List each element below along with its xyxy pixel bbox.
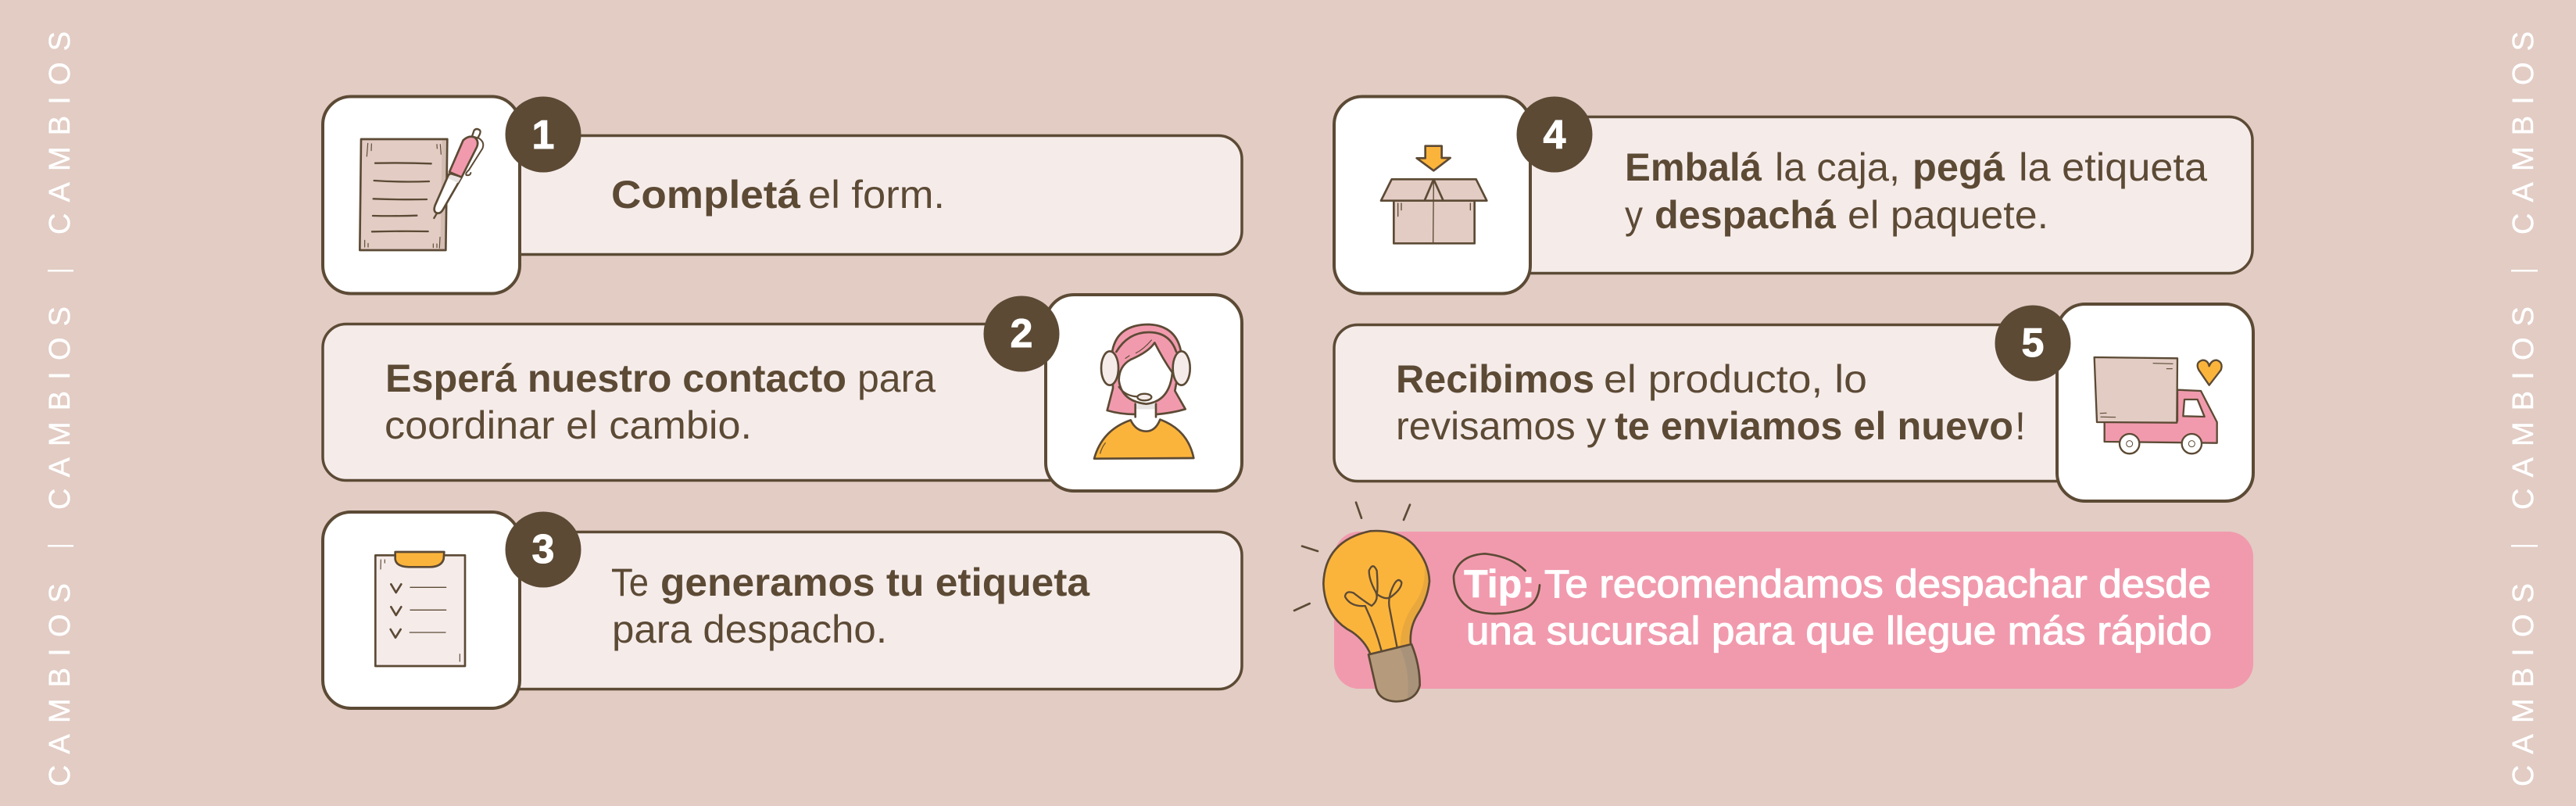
tip text [1464, 562, 2212, 653]
step 1 text: el form. [808, 173, 945, 217]
number badge 3 [505, 511, 581, 588]
icon tile 5 [2057, 304, 2253, 501]
step 2 text: para [857, 356, 936, 400]
right vertical label: CAMBIOS [2507, 31, 2540, 235]
step 5 text: ! [2015, 404, 2026, 448]
number badge 4: 4 [1544, 113, 1566, 158]
number badge 2: 2 [1011, 311, 1032, 356]
text bar 2 [323, 324, 1073, 480]
panel: step 3 [323, 511, 1242, 708]
icon tile 2 [1046, 295, 1242, 491]
text bar 3 [485, 532, 1242, 690]
step 3 text: generamos tu etiqueta [660, 561, 1090, 604]
icon tile 3 [323, 512, 520, 708]
tip text: Tip: [1464, 562, 1535, 606]
text bar 1 [485, 136, 1242, 255]
tip text: Te recomendamos despachar desde [1544, 562, 2211, 606]
step 5 text: el producto, lo [1604, 357, 1867, 401]
text bar 4 [1501, 117, 2252, 274]
step 5 text: Recibimos [1396, 357, 1594, 401]
left vertical label: CAMBIOS [44, 31, 77, 235]
text bar 5 [1334, 325, 2084, 482]
icon: support agent with headset [1094, 324, 1193, 459]
step 3 text: Te [611, 561, 649, 604]
panel: step 2 [323, 295, 1242, 491]
step 4 text: y [1625, 193, 1643, 237]
step 5 text: te enviamos el nuevo [1615, 404, 2013, 448]
step 3 text [611, 561, 1090, 651]
step 4 text: pegá [1912, 145, 2005, 189]
icon tile 1 [323, 97, 520, 294]
icon: delivery truck with heart [2095, 357, 2222, 453]
step 3 text: para despacho. [612, 607, 887, 651]
number badge 5 [1995, 305, 2071, 382]
right vertical label: CAMBIOS [2507, 583, 2540, 786]
icon: light bulb [1294, 503, 1429, 701]
step 1 text: Completá [611, 173, 800, 217]
number badge 1 [505, 97, 581, 172]
icon tile 4 [1334, 97, 1530, 294]
icon: open box with arrow [1381, 146, 1487, 243]
left vertical label: CAMBIOS [44, 583, 77, 786]
number badge 5: 5 [2022, 321, 2044, 366]
tip text: una sucursal para que llegue más rápido [1466, 609, 2212, 653]
panel: step 4 [1334, 97, 2252, 294]
right vertical label: CAMBIOS [2507, 306, 2540, 510]
step 4 text: despachá [1655, 193, 1836, 237]
step 5 text [1396, 357, 2026, 448]
step 4 text: Embalá [1625, 145, 1762, 189]
step 4 text: la caja, [1775, 145, 1900, 189]
right vertical label [2507, 31, 2540, 786]
icon: clipboard checklist [375, 552, 465, 666]
step 4 text: la etiqueta [2019, 145, 2207, 189]
tip background [1334, 532, 2253, 689]
step 4 text [1625, 145, 2207, 237]
panel: step 5 [1334, 304, 2253, 501]
number badge 2 [983, 296, 1060, 372]
panel: tip callout [1294, 503, 2253, 701]
number badge 1: 1 [532, 113, 554, 158]
icon: document and pen [360, 129, 483, 250]
left vertical label [44, 31, 77, 786]
step 2 text [385, 356, 936, 447]
hand-drawn circle around Tip [1454, 553, 1540, 614]
panel: step 1 [323, 97, 1242, 294]
step 2 text: coordinar el cambio. [385, 403, 752, 447]
step 5 text: revisamos y [1396, 404, 1606, 448]
number badge 4 [1516, 97, 1593, 172]
step 1 text [611, 173, 945, 217]
step 2 text: Esperá nuestro contacto [385, 356, 846, 400]
step 4 text: el paquete. [1848, 193, 2048, 237]
number badge 3: 3 [532, 527, 554, 572]
left vertical label: CAMBIOS [44, 306, 77, 510]
